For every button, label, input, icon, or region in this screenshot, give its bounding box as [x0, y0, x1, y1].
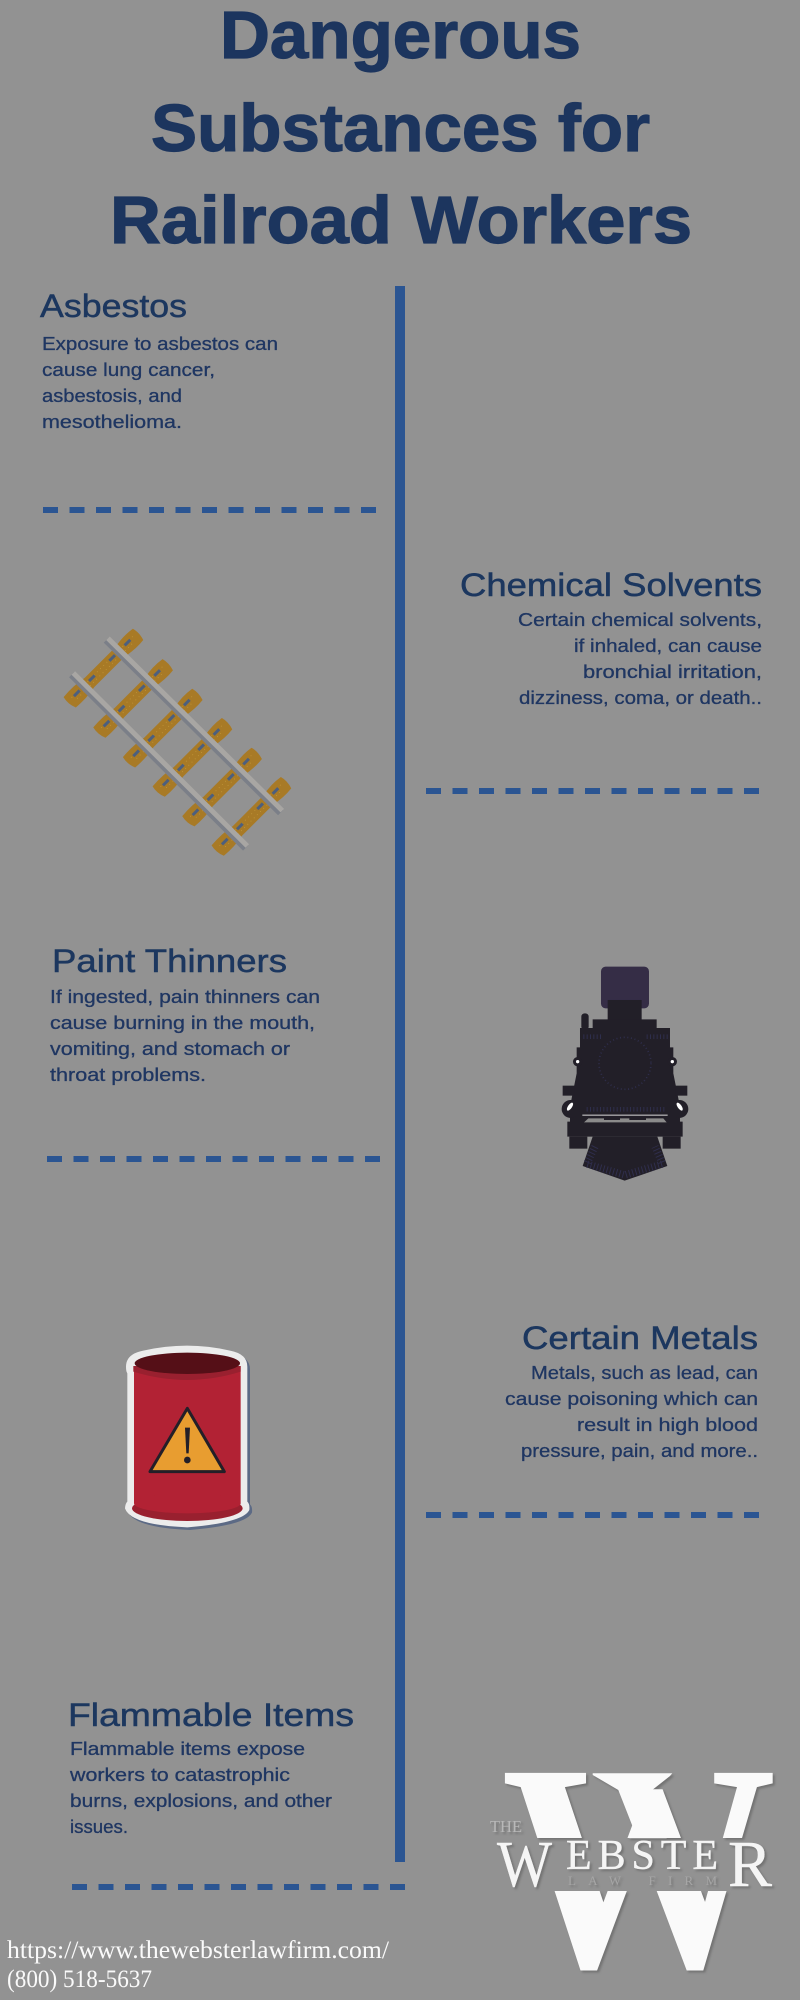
- text block: chemical solvents: [518, 609, 762, 708]
- text block: asbestos: asbestosis, and: [42, 385, 182, 406]
- title: Dangerous: [220, 0, 581, 73]
- logo: the webster law firm: [490, 1772, 776, 1973]
- panel: flammable items: [68, 1697, 354, 1837]
- text block: asbestos: cause lung cancer,: [42, 359, 215, 380]
- logo word: webster: W: [497, 1828, 553, 1901]
- logo words: law firm: LAW FIRM: [568, 1873, 717, 1888]
- panel: chemical solvents: [460, 567, 762, 708]
- text block: certain metals: [505, 1362, 758, 1461]
- warning triangle: [150, 1408, 224, 1472]
- title: Substances for: [151, 91, 650, 166]
- text block: chemical solvents: if inhaled, can cause: [574, 635, 762, 656]
- text block: flammable items: burns, explosions, and other: [70, 1790, 332, 1811]
- text block: certain metals: pressure, pain, and more..: [521, 1440, 758, 1461]
- logo word: webster: EBSTE: [566, 1833, 718, 1879]
- text block: asbestos: [42, 333, 278, 432]
- steel rails: [72, 638, 282, 848]
- logo large W middle serif: [593, 1773, 672, 1838]
- text block: asbestos: mesothelioma.: [42, 411, 182, 432]
- text block: flammable items: workers to catastrophic: [69, 1764, 290, 1785]
- heading: flammable items: Flammable Items: [68, 1697, 354, 1733]
- icon: railroad track: [63, 627, 293, 858]
- title: [110, 0, 692, 258]
- text block: certain metals: Metals, such as lead, can: [531, 1362, 758, 1383]
- text block: paint thinners: throat problems.: [50, 1064, 206, 1085]
- railroad ties: [63, 627, 293, 858]
- heading: asbestos: Asbestos: [40, 288, 187, 324]
- text block: paint thinners: cause burning in the mouth,: [50, 1012, 315, 1033]
- text block: flammable items: issues.: [70, 1816, 128, 1837]
- icon: hazard barrel: [125, 1346, 252, 1530]
- contact details: [7, 1937, 389, 1993]
- text block: certain metals: cause poisoning which can: [505, 1388, 758, 1409]
- logo word: the: THE: [490, 1817, 522, 1836]
- text block: chemical solvents: Certain chemical solvents,: [518, 609, 762, 630]
- contact details: (800) 518-5637: [7, 1966, 152, 1993]
- panel: paint thinners: [50, 943, 320, 1085]
- heading: paint thinners: Paint Thinners: [52, 943, 287, 979]
- central vertical timeline line: [395, 286, 405, 1862]
- contact details: https://www.thewebsterlawfirm.com/: [7, 1937, 389, 1964]
- text block: flammable items: [69, 1738, 332, 1837]
- heading: certain metals: Certain Metals: [522, 1320, 758, 1356]
- text block: paint thinners: vomiting, and stomach or: [50, 1038, 290, 1059]
- text block: asbestos: Exposure to asbestos can: [42, 333, 278, 354]
- panel: asbestos: [40, 288, 278, 432]
- text block: chemical solvents: dizziness, coma, or death..: [519, 687, 762, 708]
- panel: certain metals: [505, 1320, 758, 1461]
- text block: certain metals: result in high blood: [577, 1414, 758, 1435]
- text block: flammable items: Flammable items expose: [70, 1738, 305, 1759]
- logo word: webster: R: [728, 1828, 772, 1901]
- heading: chemical solvents: Chemical Solvents: [460, 567, 762, 603]
- logo word: webster: [497, 1828, 772, 1901]
- text block: paint thinners: If ingested, pain thinners can: [50, 986, 320, 1007]
- icon: steam locomotive front: [562, 967, 688, 1181]
- title: Railroad Workers: [110, 183, 692, 258]
- text block: chemical solvents: bronchial irritation,: [583, 661, 762, 682]
- text block: paint thinners: [50, 986, 320, 1085]
